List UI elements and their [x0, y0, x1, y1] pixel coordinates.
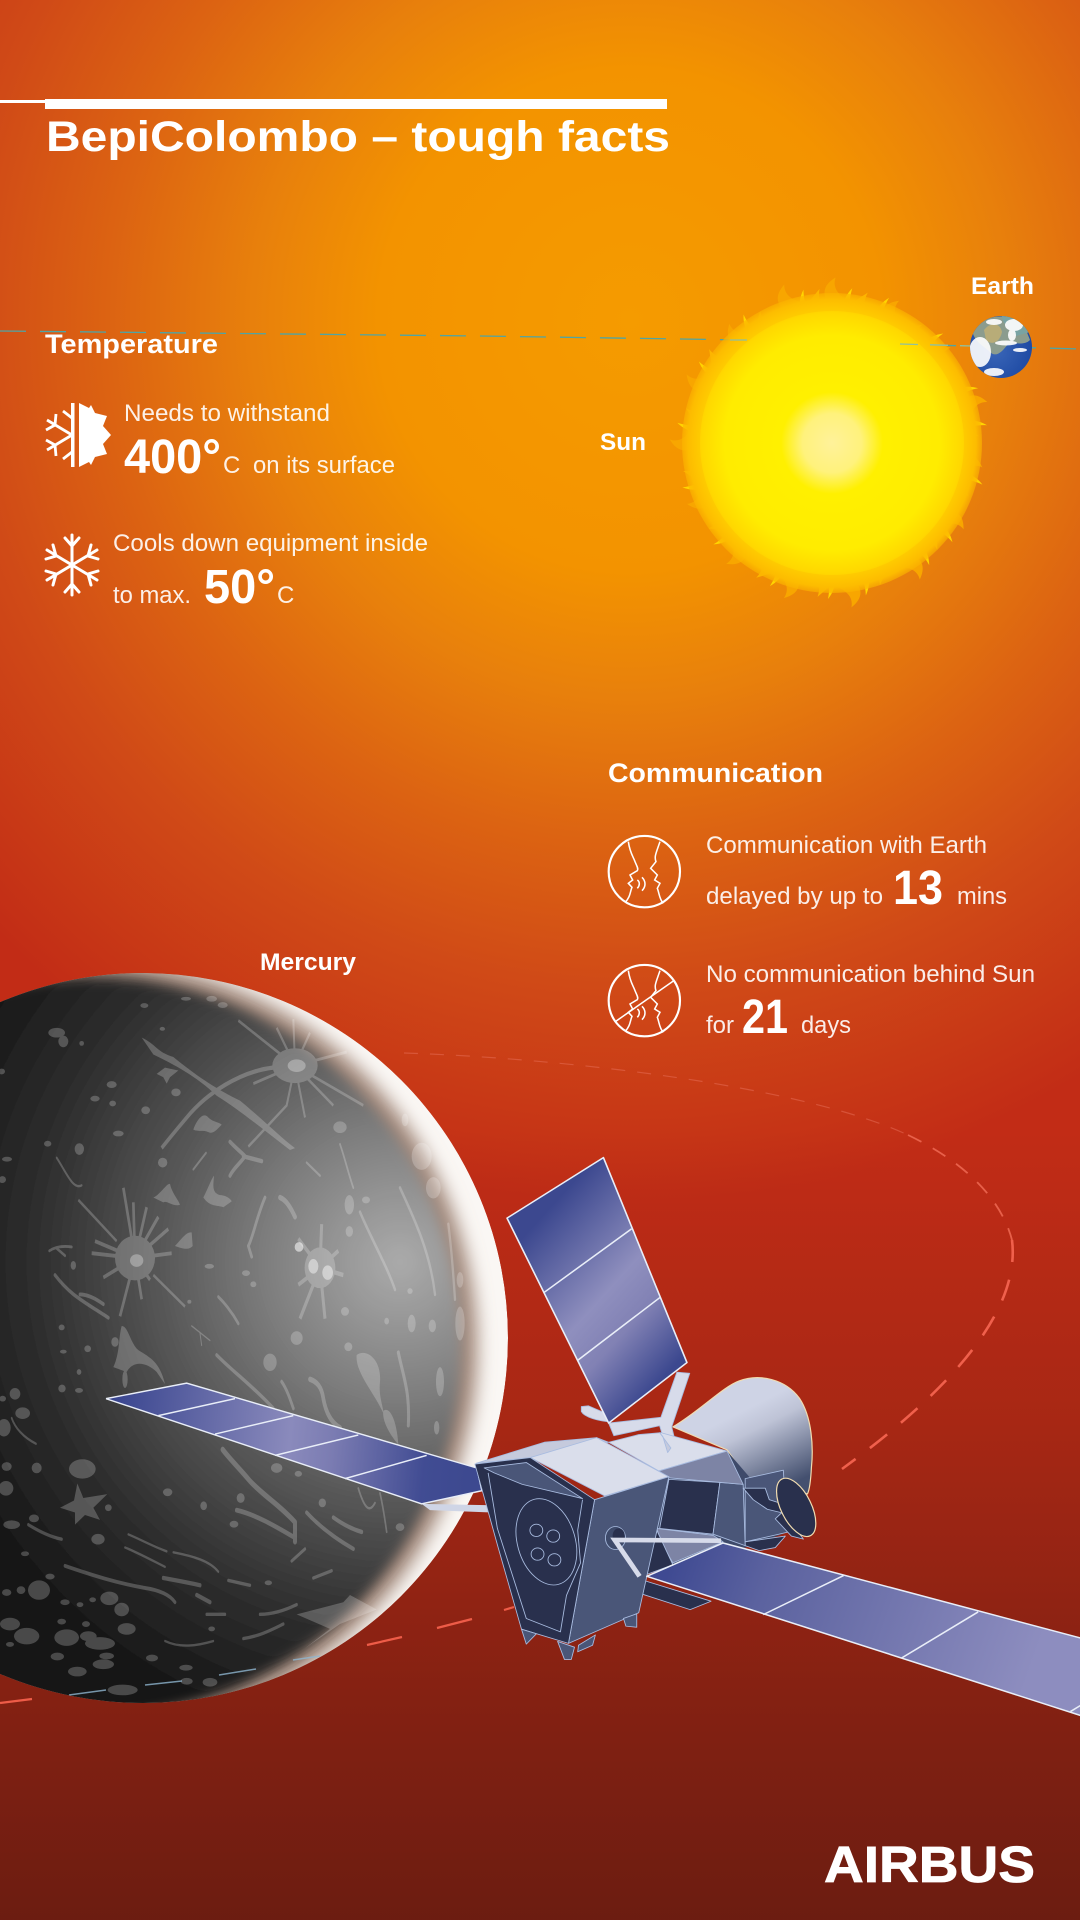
- lower right burst: [297, 1595, 377, 1648]
- blobs: [113, 1326, 165, 1384]
- value: 13: 13: [893, 862, 943, 915]
- spacecraft: antenna cone: [673, 1378, 812, 1494]
- spacecraft: small dish and arm: [743, 1473, 824, 1542]
- spacecraft: side face: [568, 1477, 669, 1643]
- crater burst: upper right: [162, 1019, 363, 1148]
- text: for: for: [706, 1012, 734, 1039]
- streak across: [142, 1038, 295, 1150]
- sun bright spikes: [676, 287, 987, 599]
- scattered streaks: [12, 1142, 455, 1646]
- crater centers: [130, 1059, 333, 1280]
- text: communication with Earth: Communication with Earth: [706, 832, 987, 859]
- text: cools down: Cools down equipment inside: [113, 530, 428, 557]
- spacecraft: box below panel: [643, 1580, 711, 1610]
- label: Mercury: Mercury: [260, 949, 357, 976]
- spacecraft: feet: [521, 1614, 637, 1659]
- text: to max.: to max.: [113, 582, 191, 609]
- orbit line in front of sun edge: [730, 340, 972, 346]
- text: days: days: [801, 1012, 851, 1039]
- crater burst: main: [78, 1188, 185, 1316]
- label: Earth: Earth: [971, 273, 1034, 300]
- orbit dashes: upper right thin: [908, 1135, 1012, 1240]
- text: C on its surface: C: [223, 452, 240, 479]
- icon: snowflake: [46, 535, 98, 595]
- text: delayed by up to: delayed by up to: [706, 883, 883, 910]
- sun inner flames: [681, 288, 979, 598]
- logo: Airbus: AIRBUS: [824, 1836, 1035, 1893]
- spacecraft: upper solar panel: [507, 1158, 687, 1423]
- icon: crossed talking faces: [609, 965, 680, 1036]
- value: 400 degrees: 400°: [124, 431, 221, 484]
- spacecraft: front face: [475, 1458, 595, 1643]
- text: C: C: [277, 582, 294, 609]
- heading: temperature: Temperature: [45, 329, 218, 359]
- spacecraft: lower solar panel: [647, 1543, 1080, 1722]
- spacecraft: upper arm: [581, 1372, 690, 1453]
- label: Sun: Sun: [600, 429, 646, 456]
- orbit behind mercury (faint blue segments): [69, 1656, 320, 1695]
- orbit dashes: top faint: [404, 1053, 908, 1135]
- text: no communication: No communication behind Sun: [706, 961, 1035, 988]
- icon: Earth: [970, 316, 1032, 378]
- spacecraft: rear modules: [647, 1470, 787, 1574]
- orbit dashes: lower left: [0, 1607, 514, 1703]
- planet: Mercury: [0, 961, 508, 1733]
- title bar rule: [0, 99, 667, 109]
- panel: communication: [608, 758, 1035, 1044]
- mercury surface markings: [0, 996, 465, 1695]
- icon: Sun: [670, 277, 993, 610]
- crater burst: small lower: [60, 1483, 107, 1525]
- sun outer flames: [670, 277, 993, 610]
- text: needs to withstand: Needs to withstand: [124, 400, 330, 427]
- value: 21: 21: [742, 991, 788, 1044]
- spacecraft: body backing: [647, 1451, 787, 1574]
- icon: half snowflake half sun: [46, 403, 111, 467]
- text: on its surface: on its surface: [253, 452, 395, 479]
- title: BepiColombo – tough facts: [46, 113, 670, 161]
- solar panel: left wing: [106, 1383, 492, 1513]
- heading: communication: Communication: [608, 758, 823, 788]
- crater burst: middle: [298, 1224, 343, 1319]
- value: 50 degrees: 50°: [204, 561, 275, 614]
- panel: temperature: [45, 329, 428, 614]
- spacecraft: top of bus: [476, 1433, 743, 1496]
- icon: talking faces: [609, 836, 680, 907]
- spacecraft: [475, 1158, 1080, 1722]
- earth land: [972, 316, 1030, 354]
- orbit line: Earth (dashed teal): [0, 331, 1080, 349]
- earth clouds: [970, 319, 1027, 376]
- orbit dashes: lower right thick: [842, 1240, 1013, 1469]
- text: mins: mins: [957, 883, 1007, 910]
- spacecraft: lower arm: [615, 1540, 721, 1576]
